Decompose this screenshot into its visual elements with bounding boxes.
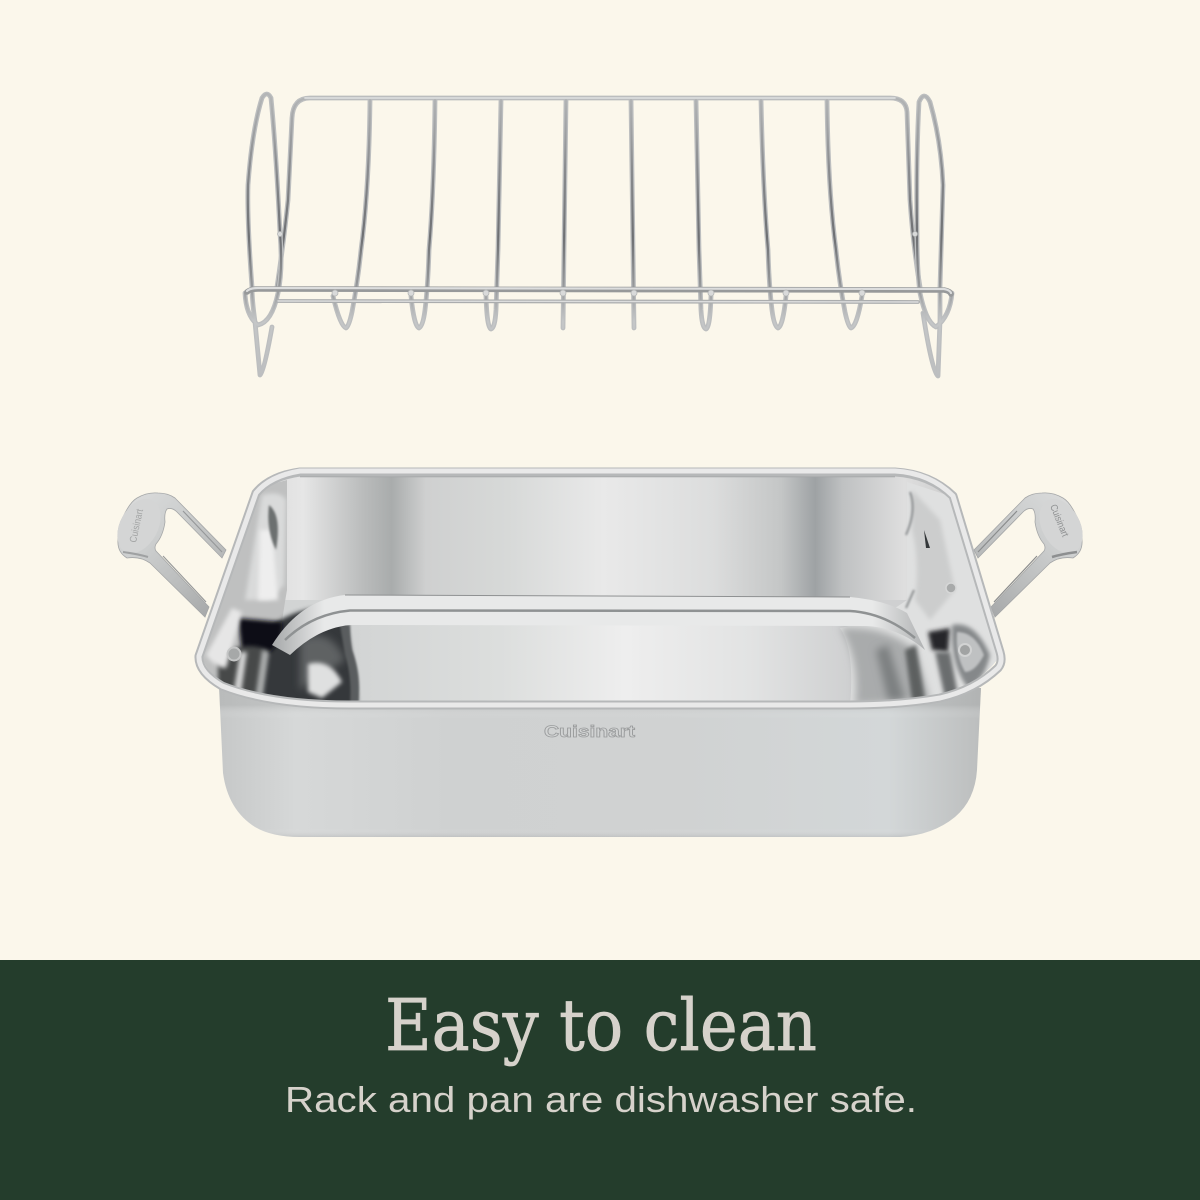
left handle [109,491,226,617]
left handle: Cuisinart [128,508,146,544]
rack back frame and ribs [277,98,920,329]
rack left end loop [245,94,281,375]
rack lower and front rails [247,288,951,302]
rack right end loop [917,96,952,376]
right handle [974,491,1091,617]
pan body shading [219,686,981,837]
wire roasting rack [245,94,952,376]
interior back wall [280,476,944,600]
right handle: Cuisinart [1047,503,1070,539]
interior left corner reflection [200,480,359,705]
pan logo: Cuisinart [544,722,635,741]
caption band [0,960,1200,1200]
interior ledge between wall and floor [272,595,925,655]
interior floor [282,600,996,700]
roasting pan [109,470,1091,837]
pan interior [200,470,1000,705]
pan outer body [219,686,981,837]
interior right corner reflection [840,482,1000,705]
back wall top shadow line [300,476,895,478]
pan rim [199,471,1001,705]
rack pin joints [278,232,918,296]
heading: Easy to clean [385,984,817,1067]
subheading: Rack and pan are dishwasher safe. [285,1079,917,1120]
